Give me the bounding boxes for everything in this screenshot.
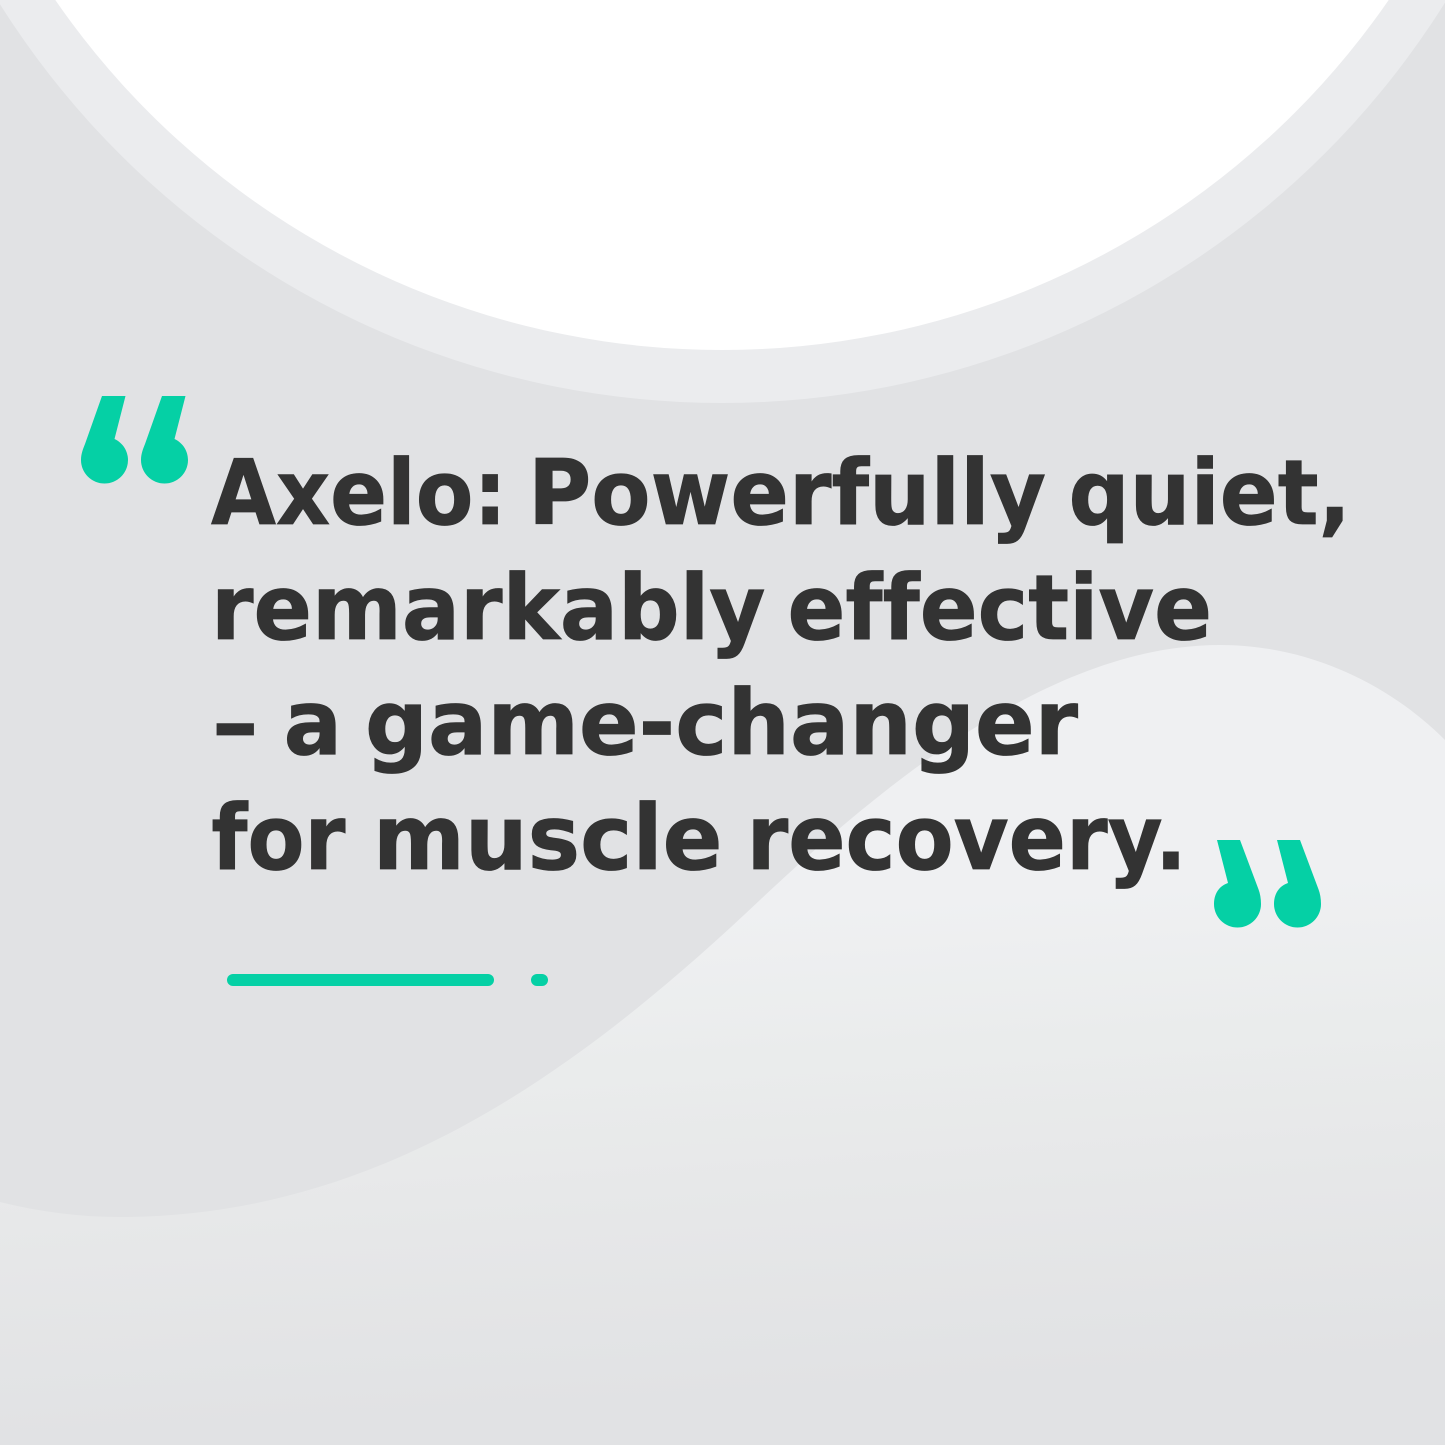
quote text: –	[212, 671, 258, 776]
lower wave shape	[0, 645, 1445, 1445]
quote text: quiet,	[1068, 441, 1351, 546]
accent line and dot	[227, 974, 548, 986]
quote text: game-changer	[365, 671, 1079, 776]
quote text: effective	[788, 556, 1212, 661]
quote text: recovery.	[747, 786, 1187, 891]
quote text: Powerfully	[528, 441, 1046, 546]
top circle halo	[0, 0, 1445, 403]
top white circle	[0, 0, 1445, 350]
quote text: muscle	[373, 786, 722, 891]
quote text: for	[211, 786, 346, 891]
quote text: Axelo:	[211, 441, 507, 546]
quote text: remarkably	[211, 556, 766, 661]
icon: closing quotation mark	[1214, 840, 1321, 927]
quote text: a	[284, 671, 342, 776]
icon: opening quotation mark	[81, 396, 188, 483]
quote text	[211, 441, 1351, 891]
